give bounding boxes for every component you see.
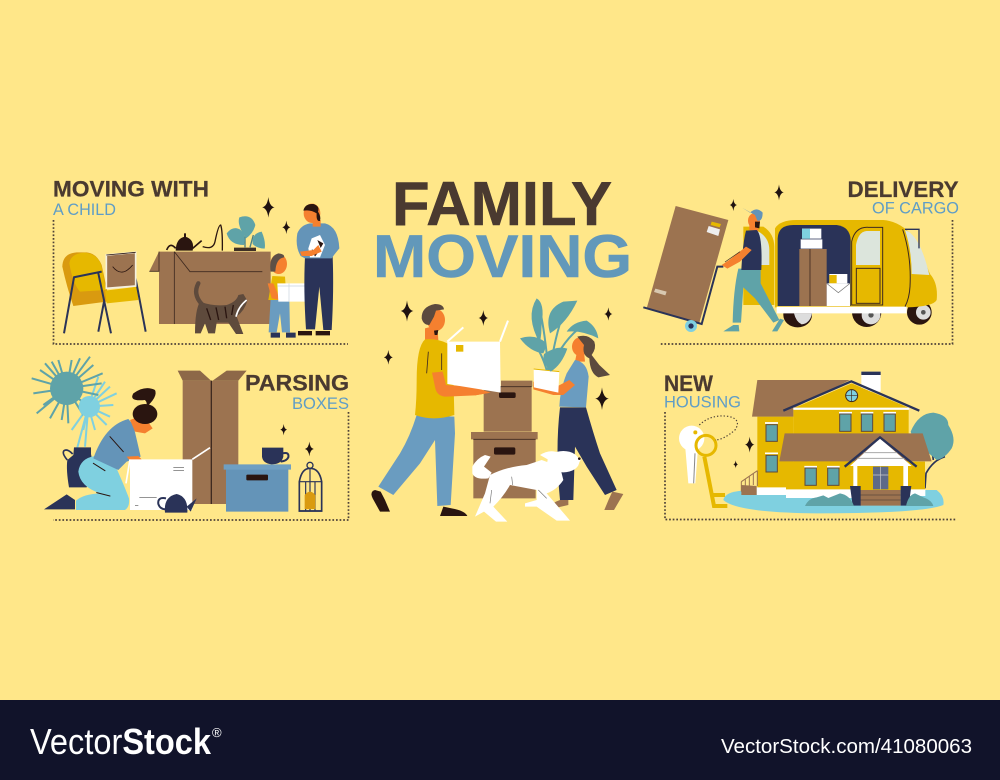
icon: woman carrying plant <box>520 298 623 510</box>
main title <box>373 170 632 290</box>
icon: child with box <box>268 253 307 338</box>
heading: new housing: NEW <box>664 371 714 396</box>
icon: sparkles <box>280 424 314 456</box>
footer bar <box>0 700 1000 780</box>
icon: mother holding toy <box>297 204 339 335</box>
icon: man carrying box <box>371 304 508 516</box>
icon: blue storage box with cup <box>224 448 291 512</box>
heading: moving with a child: A CHILD <box>53 200 116 219</box>
illustration: van and courier <box>643 184 937 332</box>
panel: moving with a child <box>53 176 348 344</box>
icon: tree <box>911 413 954 488</box>
panel: central family moving scene <box>371 298 623 522</box>
footer bar: ® <box>212 725 222 740</box>
illustration: woman unpacking <box>32 357 322 513</box>
heading: new housing: HOUSING <box>664 392 741 412</box>
heading: delivery of cargo: DELIVERY <box>848 177 958 202</box>
icon: hand truck with large box <box>643 206 728 332</box>
icon: house <box>741 372 932 506</box>
icon: palm plant in vase <box>32 357 117 487</box>
icon: white open box <box>126 448 210 510</box>
icon: tall cardboard box <box>178 371 247 504</box>
heading: parsing boxes: PARSING <box>245 370 349 396</box>
icon: sparkles <box>384 300 612 410</box>
panel: parsing boxes <box>32 357 349 520</box>
panel: new housing <box>664 371 956 520</box>
icon: large cardboard box <box>149 252 271 324</box>
icon: navy teapot <box>158 494 197 513</box>
heading: new housing <box>664 371 741 412</box>
icon: sparkles <box>262 197 290 234</box>
icon: teapot and plant on box <box>167 216 265 251</box>
icon: cargo boxes in van <box>799 229 850 306</box>
icon: key on ring <box>679 416 737 506</box>
heading: delivery of cargo <box>848 177 959 218</box>
icon: ground <box>723 490 944 513</box>
icon: sparkles <box>730 184 784 211</box>
icon: woman kneeling <box>44 388 157 510</box>
heading: parsing boxes: BOXES <box>292 394 349 413</box>
main title: FAMILY <box>392 170 612 239</box>
icon: van <box>743 220 937 327</box>
main title: MOVING <box>373 223 632 290</box>
footer bar: VectorStock.com/41080063 <box>721 736 972 758</box>
icon: birdcage lantern <box>299 462 322 511</box>
heading: delivery of cargo: OF CARGO <box>872 198 959 218</box>
icon: bushes <box>805 493 933 506</box>
brand logo: VectorStock <box>30 721 212 762</box>
panel: delivery of cargo <box>643 177 959 344</box>
icon: cat <box>195 283 247 334</box>
icon: courier <box>722 208 784 331</box>
icon: stacked boxes <box>471 381 538 498</box>
illustration: house and key <box>679 372 954 513</box>
heading: moving with a child: MOVING WITH <box>53 176 209 202</box>
icon: white dog <box>472 451 582 522</box>
heading: parsing boxes <box>245 370 349 413</box>
icon: sparkles <box>733 437 754 468</box>
illustration: chair, box, mother and child <box>62 197 339 338</box>
icon: armchair <box>62 252 146 333</box>
heading: moving with a child <box>53 176 209 219</box>
